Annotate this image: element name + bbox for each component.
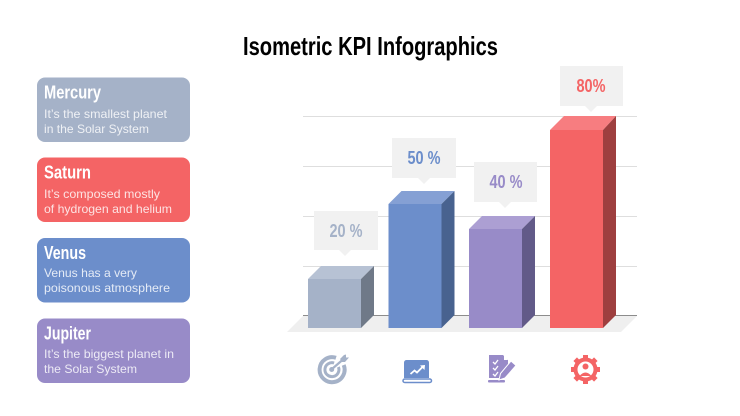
text: Venus description <box>44 266 170 295</box>
title: Isometric KPI Infographics <box>243 31 498 61</box>
callout: 40 %: 40 % <box>490 172 522 192</box>
heading: Mercury: Mercury <box>44 82 101 102</box>
chart: isometric bars <box>287 116 637 332</box>
text: Jupiter description: It’s the biggest planet in <box>44 347 174 361</box>
icon: laptop with chart <box>403 360 432 382</box>
text: Mercury description: in the Solar System <box>44 122 149 136</box>
text: Saturn description <box>44 187 172 216</box>
heading: Saturn: Saturn <box>44 162 91 182</box>
callout: 20 %: 20 % <box>330 221 362 241</box>
text: Mercury description: It’s the smallest planet <box>44 107 168 121</box>
text: Jupiter description <box>44 347 174 376</box>
panel: Jupiter <box>37 318 190 383</box>
text: Venus description: Venus has a very <box>44 266 137 280</box>
icon: gear with person <box>571 355 600 384</box>
heading: Venus: Venus <box>44 243 86 263</box>
bar: 50% <box>388 191 454 328</box>
panel: Venus <box>37 238 190 302</box>
panel: Saturn <box>37 158 190 222</box>
callout: 50 %: 50 % <box>408 148 440 168</box>
text: Mercury description <box>44 107 168 136</box>
bar: 40% <box>469 216 535 328</box>
text: Saturn description: It’s composed mostly <box>44 187 160 201</box>
callout: 80% <box>560 66 623 112</box>
heading: Jupiter: Jupiter <box>44 324 91 344</box>
text: Venus description: poisonous atmosphere <box>44 281 170 295</box>
callout: 40 % <box>474 162 537 208</box>
panel: Mercury <box>37 78 190 142</box>
bar: 80% <box>550 116 616 328</box>
icon: checklist and pencil <box>488 355 516 382</box>
callout: 80%: 80% <box>576 76 606 96</box>
bar: 20% <box>308 266 374 328</box>
text: Saturn description: of hydrogen and helium <box>44 202 172 216</box>
callout: 20 % <box>314 211 378 256</box>
callout: 50 % <box>392 138 456 184</box>
chart floor <box>287 316 637 332</box>
text: Jupiter description: the Solar System <box>44 362 137 376</box>
icon: target <box>320 354 349 382</box>
